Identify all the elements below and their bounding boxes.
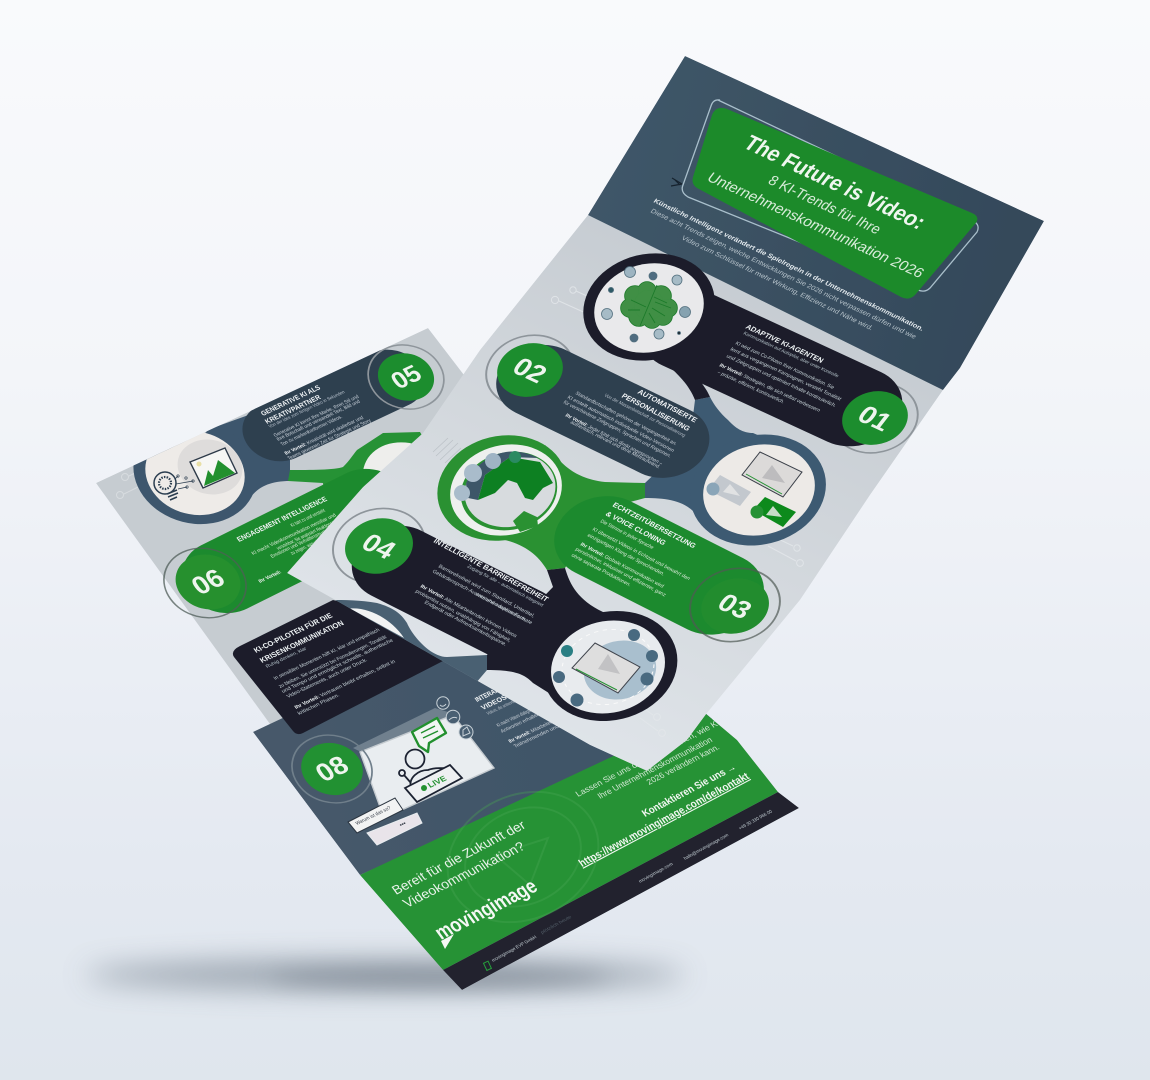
- row 04 neck: [487, 568, 640, 700]
- row 06 text: [235, 495, 338, 585]
- row 05 text: KREATIVPARTNER: [263, 393, 323, 426]
- row 04 text: [414, 536, 551, 648]
- badge 01: 01: [852, 400, 898, 437]
- hatched decoration: [433, 438, 463, 466]
- title box: [692, 108, 977, 299]
- logo: movingimage: [436, 882, 537, 949]
- row 06 text: verstehbar. Sie analysiert Reaktionen,: [276, 520, 337, 552]
- row 01 text: Ihr Vorteil: Strategien, die sich selbst verbessern: [718, 363, 821, 414]
- row 08 text: KI macht Videos dialogfähig: [496, 706, 537, 729]
- row 07 panel: zu bleiben. Sie unterstützt bei Formulierungen, Tonalität: [278, 634, 388, 690]
- title text: The Future is Video:: [739, 130, 931, 234]
- row 06 text: Emotionen und Verhaltensmuster und: [270, 524, 338, 560]
- row 02 text: Standardbotschaften gehören der Vergangenheit an.: [574, 391, 678, 447]
- floor shadow: [85, 960, 685, 990]
- blue disc: [570, 630, 670, 710]
- row 05 text: Ihre Botschaft und verwandelt Text, Bild und: [276, 399, 362, 443]
- badge 08: [301, 742, 363, 796]
- row 03 text: Ihr Vorteil: Globale Kommunikation wird: [579, 542, 665, 590]
- row 01 text: – präzise, effizient, kontinuierlich.: [716, 370, 786, 405]
- row 04 text: INTELLIGENTE BARRIEREFREIHEIT: [432, 536, 551, 604]
- badge 02: 02: [507, 352, 553, 389]
- orbit icons: [553, 629, 658, 706]
- badge 06: [176, 554, 240, 610]
- intro text: Künstliche Intelligenz verändert die Spielregeln in der Unternehmenskommunikation.: [652, 198, 925, 333]
- row 05 text: Teams gewinnen Zeit für Strategie und Story: [287, 418, 373, 462]
- row 02 text: Von der Massenbotschaft zur Personalisierung: [603, 393, 687, 439]
- icon: image frame: [190, 448, 237, 488]
- row 03 text: [570, 500, 698, 598]
- row 05 pill: [242, 350, 417, 462]
- row 01 text: [716, 322, 843, 414]
- header panel: [588, 56, 1044, 390]
- intro text: Video zum Schlüssel für mehr Wirkung, Effizienz und Nähe wird.: [680, 235, 874, 332]
- row 01 pill: [622, 277, 921, 460]
- row 03 text: Die Stimme in jeder Sprache: [599, 519, 655, 551]
- row 02 text: KI erstellt automatisch individuelle Video-Versionen: [566, 395, 675, 454]
- ring 03: [673, 555, 797, 655]
- row 02 connector: [645, 397, 760, 528]
- row 07 panel: kritischen Phasen.: [297, 693, 341, 717]
- contact link: https://www.movingimage.com/de/kontakt: [577, 771, 752, 869]
- row 06 pill: [185, 468, 381, 613]
- back sheet: [96, 328, 800, 990]
- video window: [572, 643, 640, 693]
- icon: brain: [621, 282, 677, 328]
- footer text: plötzlich heute: [540, 914, 573, 935]
- sheets: [96, 56, 1044, 990]
- ring 01: [816, 371, 934, 465]
- icon: chevron mark: [671, 178, 682, 186]
- row 05 connector: slate neck: [206, 416, 290, 496]
- presenter icon: [399, 750, 462, 802]
- row 03 text: & VOICE CLONING: [604, 509, 668, 547]
- footer text: movingimage EVP GmbH: [491, 935, 537, 963]
- front sheet: [287, 56, 1044, 771]
- row 07 panel: Ruhig denken, klar: [265, 646, 308, 670]
- row 07 panel: KRISENKOMMUNIKATION: [258, 619, 346, 665]
- row 03 text: ohne separate Produktionen.: [570, 553, 632, 588]
- badge 05: [378, 353, 434, 401]
- browser window: [353, 708, 448, 752]
- CTA heading: Bereit für die Zukunft der: [389, 817, 529, 897]
- live video illustration: [348, 697, 494, 845]
- row 07 panel: KI-CO-PILOTEN FÜR DIE: [252, 611, 334, 655]
- row 02 text: Ihr Vorteil: Jeder fühlt sich direkt angesprochen –: [564, 413, 664, 467]
- row 06 text: KI hört zu und versteht: [290, 508, 327, 529]
- question chat box: Warum ist das so?: [355, 805, 392, 827]
- row 02 pill: [479, 332, 726, 491]
- row 07 panel: [232, 600, 443, 734]
- row 05 text: Ihr Vorteil: Kreativität wird skalierbar und: [284, 415, 365, 457]
- badge 03: [688, 568, 782, 644]
- row 05 text: [259, 383, 373, 462]
- row 01 text: ADAPTIVE KI-AGENTEN: [744, 322, 826, 365]
- badge 08: 08: [310, 750, 354, 788]
- logo: movingimage: movingimage: [430, 875, 542, 944]
- badge 03: 03: [712, 588, 758, 625]
- large video window: [742, 452, 802, 497]
- row 06 text: Ihr Vorteil:: [258, 569, 283, 585]
- image fragment: [368, 470, 388, 485]
- badge 01: [829, 382, 921, 454]
- globe circle: [412, 417, 592, 559]
- badge 02: [484, 334, 576, 406]
- row 08 text: Videos, die antworten: [486, 698, 518, 717]
- row 05 image circle: [133, 432, 253, 524]
- small grey window: [708, 475, 751, 506]
- row 07 panel: Video-Statements, auch unter Druck.: [286, 657, 369, 700]
- row 04 text: problemlos nutzen, unabhängig von Fähigkeit,: [414, 589, 512, 644]
- ring 02: [469, 323, 591, 419]
- speech bubble: [412, 718, 446, 752]
- row 04 text: Zugang für alle – automatisch integriert: [466, 564, 545, 609]
- row 04 text: Barrierefreiheit wird zum Standard. Untertitel,: [437, 564, 536, 619]
- row 02 text: PERSONALISIERUNG: [620, 391, 692, 433]
- row 03 text: persönlicher, inklusiver und effizienter, ganz: [574, 547, 667, 598]
- row 06 connector: green neck and image circle: [288, 432, 422, 485]
- row 06 text: KI macht Videokommunikation messbar und: [251, 513, 338, 557]
- row 07 panel: und Tempo und ermöglicht schnelle, authentische: [281, 638, 395, 695]
- row 04 pill: [334, 512, 579, 675]
- row 03 pill: [535, 481, 783, 650]
- typing chat box: •••: [399, 821, 408, 829]
- row 04 text: Gebärdensprach-Avatare und adaptive Formate: [431, 569, 534, 626]
- row 03 text: ECHTZEITÜBERSETZUNG: [611, 500, 698, 550]
- row 02 image circle: [664, 415, 852, 565]
- row 03 connector: green strip and neck: [505, 445, 645, 570]
- row 05 text: Von der Idee zum fertigen Video in Sekunden: [268, 389, 347, 430]
- panel: green contact band: [360, 713, 778, 970]
- CTA heading: Videokommunikation?: [400, 839, 528, 910]
- CTA text: Lassen Sie uns darüber sprechen, wie KI: [573, 718, 722, 799]
- badge 04: 04: [356, 528, 402, 565]
- green video window: [753, 497, 796, 527]
- badge 05: 05: [385, 360, 427, 395]
- intro text: Diese acht Trends zeigen, welche Entwicklungen Sie 2026 nicht verpassen dürfen und wie: [649, 208, 918, 341]
- ring 06: [163, 548, 247, 618]
- row 03 text: einzigartigen Klang der Sprechenden.: [586, 533, 666, 577]
- row 06 text: ENGAGEMENT INTELLIGENCE: [235, 495, 329, 544]
- ring 08: [291, 734, 373, 804]
- row 08 text: INTERAKTIVE: [474, 682, 513, 704]
- icon: light bulb: [154, 472, 194, 500]
- row 07 panel: Ihr Vorteil: Vertrauen bleibt erhalten, selbst in: [294, 659, 397, 711]
- title box: 8 KI-Trends für Ihre: [765, 173, 884, 238]
- row 08 text: VIDEOS: [480, 694, 509, 712]
- row 03 text: KI übersetzt Videos in Echtzeit und bewahrt den: [591, 527, 691, 582]
- row 01 text: und Zielgruppen und optimiert Inhalte kontinuierlich.: [725, 354, 837, 409]
- globe slate crescent: [466, 451, 538, 500]
- footer bar: [443, 792, 799, 990]
- illustration disc: [178, 440, 242, 494]
- row 01 text: lernt aus vergangenen Kampagnen, versteht Tonalität: [729, 347, 843, 402]
- row 04 text: entstehen automatisch.: [474, 592, 528, 623]
- circuit decorations back: [116, 473, 138, 499]
- title box: Unternehmenskommunikation 2026: [704, 170, 927, 281]
- row 05 text: Ton zu markenkonformen Videos.: [280, 414, 344, 448]
- contact link: Kontaktieren Sie uns →: [640, 761, 739, 819]
- row 02 text: [562, 387, 699, 470]
- badge 04: [332, 508, 426, 584]
- row 08 text: Ihr Vorteil: Mitarbeitende: [508, 717, 559, 745]
- row 07 panel: In sensiblen Momenten hilft KI, klar und empathisch: [273, 627, 381, 682]
- question chat box: [348, 798, 403, 833]
- row 06 text: zu zeigen, was wirkt.: [290, 537, 324, 557]
- CTA text: 2026 verändern kann.: [644, 742, 721, 787]
- row 08 text: [474, 690, 559, 748]
- dashed orbit: [544, 616, 672, 718]
- row 04/05 connector arc: [330, 600, 487, 690]
- LIVE label: LIVE: [426, 774, 449, 790]
- reaction icons: [437, 697, 473, 739]
- typing chat box: [367, 813, 422, 845]
- row 08 text: Teilnehmenden und: [513, 724, 561, 750]
- row 01 brain circle: [558, 234, 740, 380]
- row 01 neck: [655, 355, 720, 400]
- circuit decorations: [551, 287, 803, 736]
- globe bubbles: [485, 453, 501, 469]
- row 08 text: Antworten erhalten: [500, 712, 541, 735]
- panel: live video section: [253, 661, 712, 875]
- orbit chips: [602, 266, 690, 342]
- row 04 text: Endgerät oder Aufmerksamkeitsspanne.: [423, 600, 508, 648]
- watermark logo: [446, 791, 599, 923]
- footer text: +49 30 330 966 00: [738, 809, 773, 831]
- footer text: [483, 809, 773, 970]
- footer text: hallo@movingimage.com: [683, 832, 729, 861]
- row 05 text: GENERATIVE KI ALS: [259, 383, 322, 418]
- row 01 text: KI wird zum Co-Piloten Ihrer Kommunikation. Sie: [734, 341, 836, 391]
- icon: footer logo mark: [483, 961, 491, 970]
- title outline: [682, 100, 978, 291]
- row 02 text: authentisch, relevant und ohne Mehraufwand.: [569, 420, 661, 470]
- row 05 text: Generative KI kennt Ihre Marke, Ihren Stil und: [273, 394, 360, 439]
- ring 04: [315, 495, 443, 597]
- row 01 text: Kommunikation auf Autopilot, aber unter Kontrolle: [742, 331, 840, 379]
- row 02 text: für verschiedene Zielgruppen, Sprachen und Regionen.: [562, 400, 672, 459]
- ring 05: [367, 344, 445, 410]
- row 04 text: Ihr Vorteil: Alle Mitarbeitenden können Videos: [419, 584, 518, 639]
- row 04 image circle: [517, 592, 703, 740]
- footer text: movingimage.com: [638, 861, 674, 884]
- badge 06: 06: [186, 563, 230, 601]
- globe map: [478, 457, 553, 500]
- CTA text: Ihre Unternehmenskommunikation: [595, 735, 714, 801]
- row 02 text: AUTOMATISIERTE: [636, 387, 699, 424]
